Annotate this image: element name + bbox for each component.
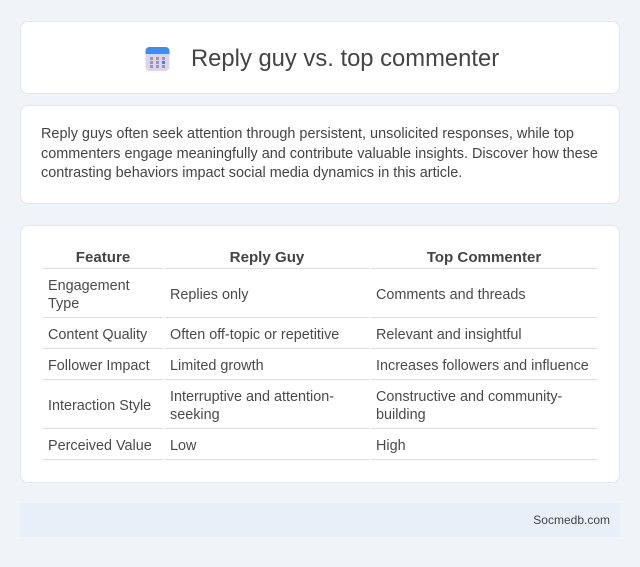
row: content quality xyxy=(48,327,522,343)
row: engagement type xyxy=(48,278,526,312)
table card xyxy=(20,225,620,483)
icon: calendar xyxy=(146,47,170,71)
row: engagement type: Engagement xyxy=(48,278,130,294)
row: content quality: Content Quality xyxy=(48,327,147,343)
row: interaction style xyxy=(48,389,562,423)
row: follower impact xyxy=(48,358,589,374)
column headers: Reply Guy xyxy=(230,249,304,266)
row: interaction style: Constructive and community- xyxy=(376,389,562,405)
title card xyxy=(20,21,620,94)
row: content quality: Relevant and insightful xyxy=(376,327,522,343)
column headers xyxy=(76,249,542,266)
row: perceived value: Low xyxy=(170,438,196,454)
row: interaction style: Interruptive and attention- xyxy=(170,389,334,405)
row: follower impact: Limited growth xyxy=(170,358,264,374)
intro text: commenters engage meaningfully and contribute valuable insights. Discover how these xyxy=(41,146,598,162)
footer text: Socmedb.com xyxy=(533,513,610,527)
row: perceived value: High xyxy=(376,438,406,454)
row: follower impact: Follower Impact xyxy=(48,358,150,374)
row: engagement type: Comments and threads xyxy=(376,287,526,303)
row: perceived value xyxy=(48,438,406,454)
footer bar xyxy=(20,503,620,537)
row: perceived value: Perceived Value xyxy=(48,438,152,454)
row: content quality: Often off-topic or repetitive xyxy=(170,327,339,343)
comparison table xyxy=(43,249,597,460)
intro card xyxy=(20,105,620,204)
row: follower impact: Increases followers and influence xyxy=(376,358,589,374)
title: Reply guy vs. top commenter xyxy=(191,45,499,72)
row: interaction style: seeking xyxy=(170,407,220,423)
intro text: Reply guys often seek attention through persistent, unsolicited responses, while top xyxy=(41,126,574,142)
intro text xyxy=(41,126,598,181)
row: engagement type: Replies only xyxy=(170,287,248,303)
row: interaction style: Interaction Style xyxy=(48,398,151,414)
row: interaction style: building xyxy=(376,407,426,423)
column headers: Top Commenter xyxy=(427,249,541,266)
intro text: contrasting behaviors impact social media dynamics in this article. xyxy=(41,165,462,181)
column headers: Feature xyxy=(76,249,130,266)
row: engagement type: Type xyxy=(48,296,79,312)
